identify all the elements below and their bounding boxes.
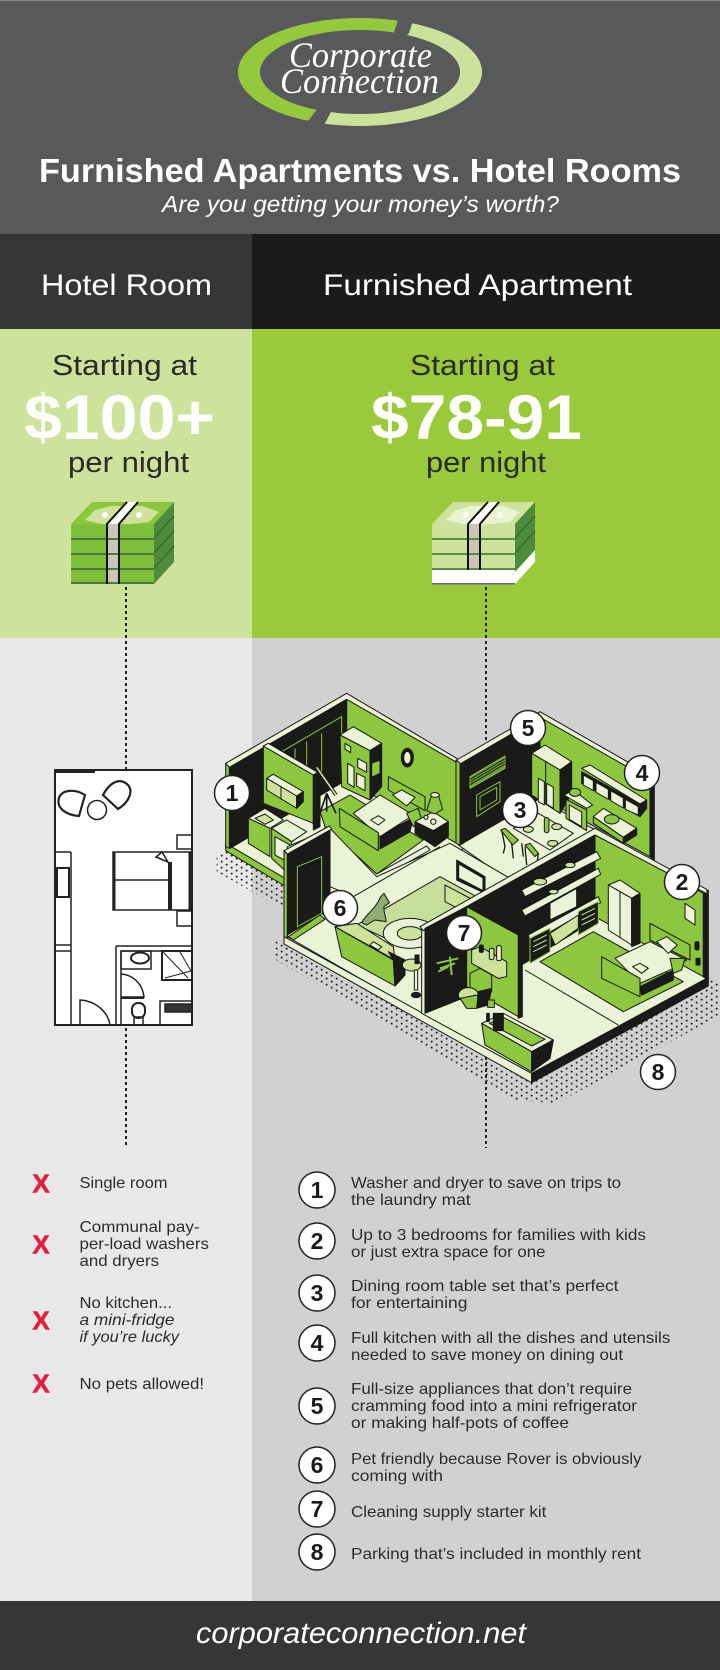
marker 3 (502, 792, 538, 828)
side table (402, 955, 421, 998)
sofa (335, 923, 405, 986)
benefit 5: 5 (311, 1393, 324, 1419)
refrigerator (532, 745, 572, 813)
subtitle: Are you getting your money’s worth? (160, 191, 559, 217)
shelves and desk (522, 852, 601, 963)
wardrobe (340, 727, 382, 800)
panel: hotel price (0, 329, 252, 638)
panel: apartment price (252, 329, 720, 638)
benefit 6: 6 (311, 1452, 323, 1478)
benefit 2: or just extra space for one (351, 1244, 546, 1261)
telescope (317, 767, 336, 813)
drawback: communal laundry: and dryers (80, 1253, 159, 1270)
marker 5: 5 (522, 715, 535, 741)
room: second bedroom, bathroom and slab (284, 828, 708, 1083)
number markers on illustration (214, 710, 700, 1090)
benefit 7 (299, 1491, 547, 1527)
benefit 2: 2 (311, 1228, 323, 1254)
clock (401, 748, 413, 767)
title: Furnished Apartments vs. Hotel Rooms (39, 152, 681, 189)
benefit 1: the laundry mat (351, 1192, 471, 1209)
panel: hotel price: per night (68, 447, 189, 479)
list: hotel drawbacks (32, 1168, 209, 1398)
panel: hotel price: $100+ (24, 383, 215, 453)
panel: apartment price: $78-91 (371, 383, 582, 453)
wall picture (685, 903, 695, 925)
drawback: communal laundry: per-load washers (80, 1236, 209, 1253)
room: kitchen and dining (456, 712, 654, 880)
dining table and chairs (501, 813, 573, 867)
benefit 6 (299, 1447, 641, 1485)
drawback: single room: X (32, 1168, 50, 1198)
benefit 6: coming with (351, 1468, 443, 1485)
list: apartment benefits (299, 1172, 670, 1570)
benefit 5 (299, 1381, 638, 1432)
marker 2: 2 (676, 869, 688, 895)
drawback: communal laundry: X (32, 1230, 50, 1260)
dotted connector: hotel (125, 587, 127, 1148)
benefit 1 (299, 1172, 621, 1209)
drawback: no pets: No pets allowed! (80, 1376, 204, 1393)
panel: hotel room column heading: Hotel Room (41, 269, 212, 302)
television on stand (445, 860, 485, 917)
drawback: no kitchen: No kitchen... (80, 1295, 172, 1312)
benefit 8: 8 (311, 1539, 324, 1565)
benefit 8 (299, 1534, 642, 1570)
marker 6 (322, 890, 358, 926)
benefit 5: Full-size appliances that don’t require (351, 1381, 632, 1398)
benefit 4: 4 (311, 1330, 324, 1356)
benefit 5: cramming food into a mini refrigerator (351, 1398, 638, 1415)
drawback: no kitchen: X (32, 1306, 50, 1336)
logo: Corporate (289, 35, 432, 75)
cleaning supplies shelf (472, 945, 507, 978)
benefit 4 (299, 1325, 670, 1364)
entry wall with door (284, 826, 332, 940)
benefit 3: for entertaining (351, 1295, 467, 1312)
marker 1 (214, 776, 250, 810)
marker 4: 4 (636, 760, 649, 786)
benefit 8: Parking that’s included in monthly rent (351, 1546, 642, 1563)
benefit 2: Up to 3 bedrooms for families with kids (351, 1227, 646, 1244)
panel: hotel room column heading (0, 234, 252, 329)
bed (339, 777, 425, 851)
panel: hotel lower background (0, 638, 252, 1601)
nightstand with lamp (415, 793, 448, 847)
wardrobe (608, 880, 640, 947)
bed (602, 923, 690, 997)
marker 1: 1 (226, 780, 239, 806)
benefit 2 (299, 1223, 646, 1261)
panel: apartment price: per night (426, 447, 546, 479)
icon: full money stack (71, 502, 174, 584)
benefit 7: Cleaning supply starter kit (351, 1504, 547, 1521)
drawback: no kitchen: if you’re lucky (80, 1329, 180, 1346)
benefit 3 (299, 1275, 619, 1312)
marker 8: 8 (652, 1059, 665, 1085)
benefit 1: 1 (311, 1177, 324, 1203)
dog (362, 893, 389, 925)
benefit 1: Washer and dryer to save on trips to (351, 1175, 621, 1192)
drawback: single room (32, 1168, 168, 1198)
marker 4 (624, 756, 660, 790)
illustration: isometric apartment (217, 693, 720, 1103)
panel: header (0, 0, 720, 234)
kitchen cabinets and sink (564, 765, 647, 843)
benefit 3: Dining room table set that’s perfect (351, 1278, 619, 1295)
benefit 5: or making half-pots of coffee (351, 1415, 569, 1432)
floor plan: hotel room (55, 770, 192, 1025)
logo: Connection (280, 61, 439, 101)
window with blinds (470, 756, 505, 817)
room: living room (284, 826, 510, 1015)
drawback: communal laundry (32, 1219, 209, 1270)
marker 7 (446, 916, 482, 950)
panel: apartment price: Starting at (410, 350, 555, 382)
round rug (383, 918, 437, 948)
marker 5 (510, 710, 546, 746)
room: bedroom with telescope and laundry (226, 693, 467, 915)
drawback: single room: Single room (80, 1175, 168, 1192)
benefit 7: 7 (311, 1496, 323, 1522)
panel: hotel price: Starting at (52, 350, 197, 382)
bathroom wall with mop (425, 907, 522, 1018)
benefit 4: needed to save money on dining out (351, 1347, 624, 1364)
marker 3: 3 (514, 797, 526, 823)
marker 2 (664, 864, 700, 900)
bathtub (482, 1013, 553, 1072)
drawback: no pets (32, 1368, 204, 1398)
panel: furnished apartment column heading (252, 234, 720, 329)
drawback: no pets: X (32, 1368, 50, 1398)
marker 6: 6 (334, 895, 346, 921)
marker 8 (640, 1054, 676, 1090)
drawback: no kitchen (32, 1295, 180, 1346)
icon: reduced money stack (432, 502, 535, 584)
benefit 3: 3 (311, 1280, 323, 1306)
logo (238, 18, 482, 126)
panel: furnished apartment column heading: Furnished Apartment (323, 269, 633, 302)
dotted connector: apartment (485, 587, 487, 1148)
drawback: communal laundry: Communal pay- (80, 1219, 200, 1236)
toilet (458, 968, 494, 1008)
footer: corporateconnection.net (196, 1617, 528, 1650)
parking dot shadow (217, 850, 720, 1103)
benefit 4: Full kitchen with all the dishes and utensils (351, 1330, 670, 1347)
rug and floor line (540, 932, 683, 1012)
drawback: no kitchen: a mini-fridge (80, 1312, 175, 1329)
laundry partition with washer and dryer (248, 743, 320, 877)
marker 7: 7 (458, 920, 470, 946)
footer (0, 1601, 720, 1670)
panel: apartment lower background (252, 638, 720, 1601)
benefit 6: Pet friendly because Rover is obviously (351, 1451, 641, 1468)
